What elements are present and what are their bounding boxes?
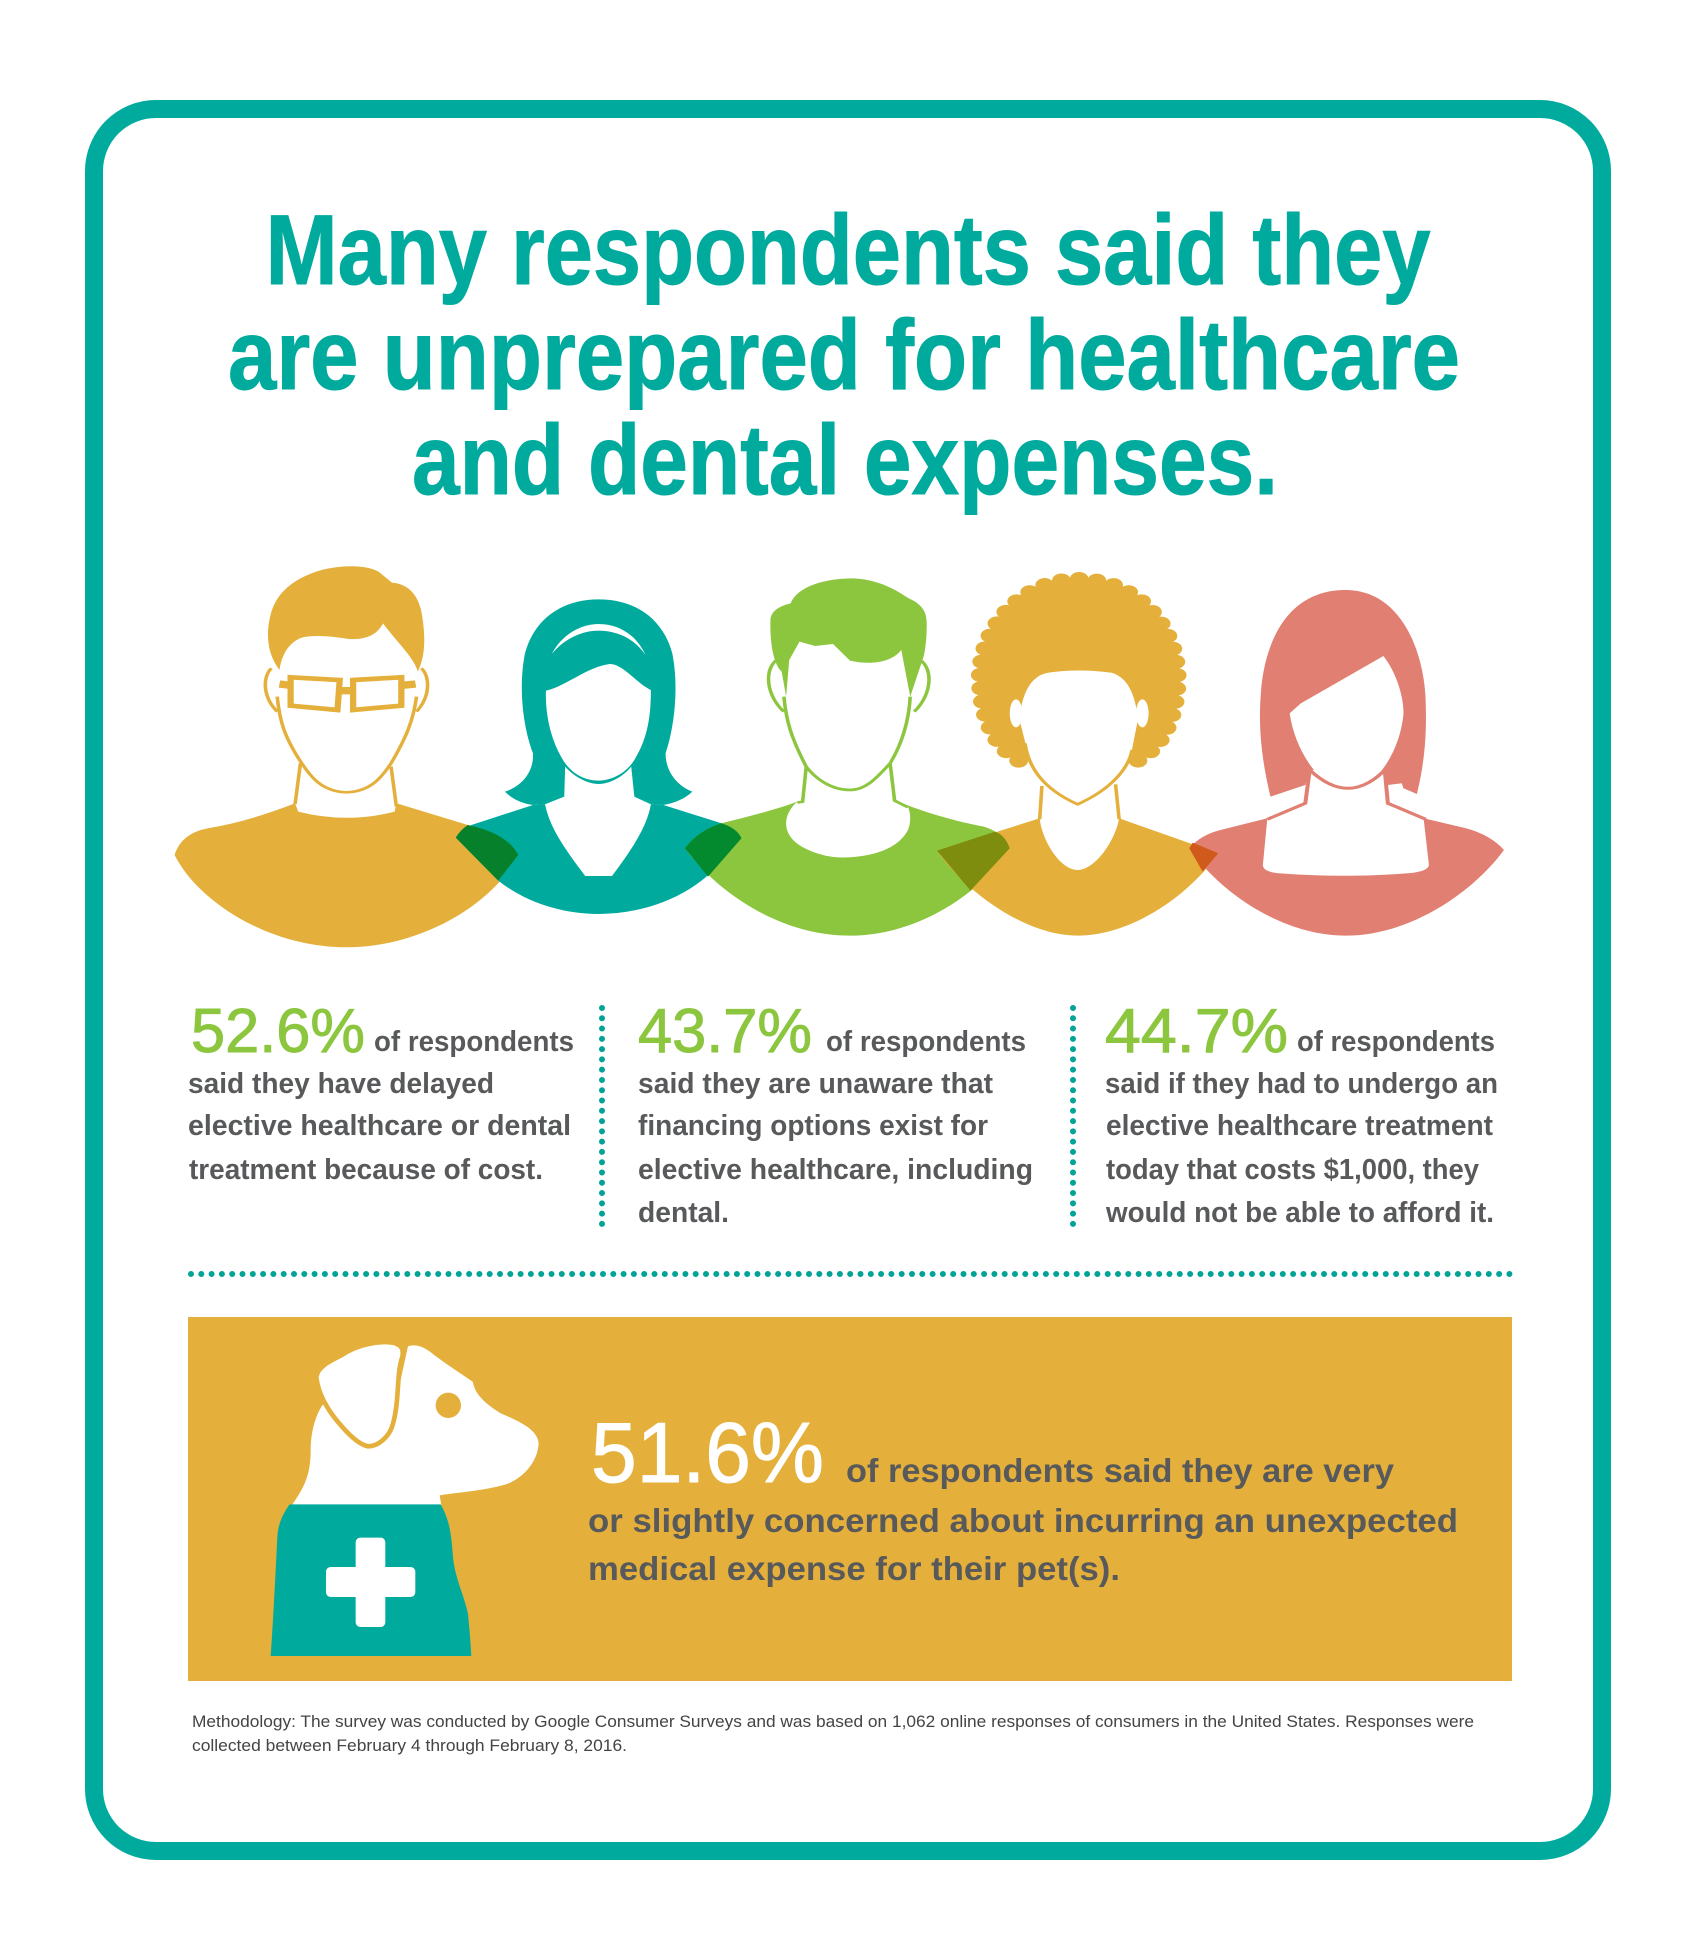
dotted divider [1070, 1008, 1076, 1224]
title: Many respondents said they [266, 194, 1430, 305]
stat column 1: treatment because of cost. [189, 1154, 543, 1186]
methodology note [192, 1712, 1474, 1755]
stat column 1: said they have delayed [188, 1068, 494, 1100]
stat column 2: elective healthcare, including [638, 1154, 1033, 1186]
stat column 2: said they are unaware that [638, 1068, 993, 1100]
person: man with green hair [685, 578, 1010, 936]
person: woman with afro [937, 579, 1218, 936]
stat column 3: would not be able to afford it. [1105, 1197, 1494, 1229]
stat column 1: 52.6% [191, 997, 365, 1066]
callout text: or slightly concerned about incurring an unexpected [588, 1502, 1458, 1539]
callout text: of respondents said they are very [846, 1452, 1395, 1489]
panel: pet expense callout [188, 1317, 1512, 1681]
title [228, 194, 1460, 515]
stat column 3: said if they had to undergo an [1105, 1068, 1498, 1100]
stat column 2: dental. [638, 1197, 729, 1229]
title: and dental expenses. [412, 404, 1278, 515]
stat column 3 [1105, 997, 1498, 1229]
person: man with glasses [175, 566, 518, 947]
stat column 1: of respondents [374, 1026, 574, 1058]
stat column 3: of respondents [1297, 1026, 1495, 1058]
stat column 3: elective healthcare treatment [1106, 1110, 1493, 1142]
person: woman with headband [456, 599, 741, 914]
rounded border frame [94, 109, 1602, 1851]
dotted divider [599, 1008, 605, 1224]
callout text: 51.6% [591, 1406, 824, 1501]
title: are unprepared for healthcare [228, 299, 1460, 410]
methodology note: collected between February 4 through February 8, 2016. [192, 1736, 627, 1755]
people illustration [175, 566, 1504, 947]
stat column 1: elective healthcare or dental [188, 1110, 571, 1142]
stat column 3: today that costs $1,000, they [1106, 1154, 1479, 1186]
callout text [588, 1406, 1458, 1587]
stat column 2: financing options exist for [638, 1110, 988, 1142]
stat column 2 [638, 997, 1033, 1229]
methodology note: Methodology: The survey was conducted by Google Consumer Surveys and was based on 1,062 online responses of consumers in the United States. Responses were [192, 1712, 1474, 1731]
stat column 3: 44.7% [1105, 997, 1288, 1066]
shoulder overlaps [456, 823, 1218, 891]
icon: dog with medical jacket [271, 1342, 539, 1656]
stat column 2: of respondents [826, 1026, 1026, 1058]
stat column 1 [188, 997, 574, 1186]
horizontal dotted divider [191, 1271, 1511, 1277]
stat column 2: 43.7% [638, 997, 812, 1066]
person: woman with pink hair [1189, 590, 1504, 936]
callout text: medical expense for their pet(s). [588, 1550, 1120, 1587]
